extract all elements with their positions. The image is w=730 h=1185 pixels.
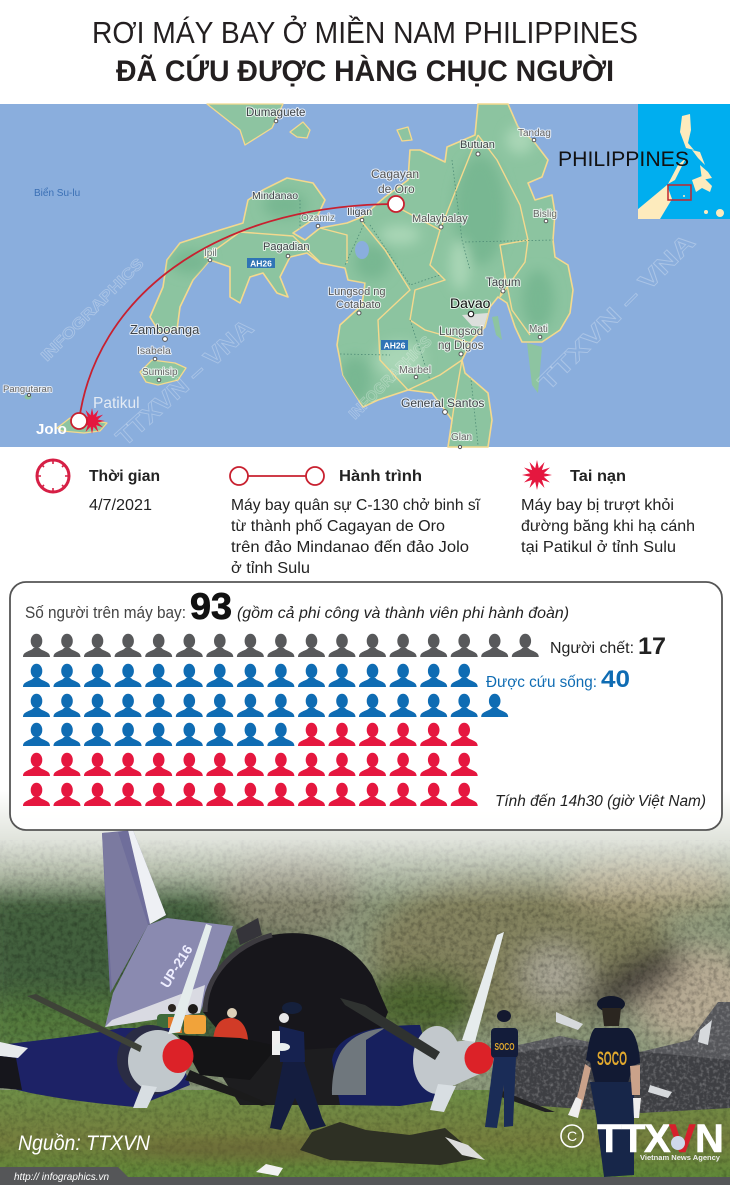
description: từ thành phố Cagayan de Oro <box>231 518 445 535</box>
copyright mark: C <box>567 1128 577 1144</box>
label PHILIPPINES: PHILIPPINES <box>558 148 689 171</box>
map watermarks <box>38 229 701 451</box>
left engine <box>117 1025 169 1095</box>
inset locator map <box>635 104 730 219</box>
city dots <box>28 119 548 449</box>
investigator SOCO small <box>485 1010 518 1128</box>
title line 2: ĐÃ CỨU ĐƯỢC HÀNG CHỤC NGƯỜI <box>116 54 614 88</box>
label dead <box>550 633 666 660</box>
place labels <box>3 107 557 443</box>
red row 1 <box>23 753 478 776</box>
footer tab <box>0 1167 128 1185</box>
legend: time <box>36 459 160 514</box>
legend: journey <box>230 467 482 577</box>
grass <box>0 1090 730 1180</box>
timestamp note: Tính đến 14h30 (giờ Việt Nam) <box>495 793 706 810</box>
source credit: Nguồn: TTXVN <box>18 1132 151 1155</box>
icon: crash burst <box>79 408 105 434</box>
left spinner <box>162 1039 194 1073</box>
map watermarks: TTXVN – VNA <box>533 229 701 396</box>
place labels: Ipil <box>204 248 217 259</box>
rescued row 1 <box>23 664 478 687</box>
total heading <box>25 586 569 627</box>
investigator SOCO large <box>568 996 641 1177</box>
total heading: Số người trên máy bay: <box>25 604 186 622</box>
place labels: Marbel <box>399 364 431 376</box>
right propeller blades <box>462 932 504 1042</box>
photo: crashed aircraft <box>0 790 730 1185</box>
map watermarks: TTXVN – VNA <box>111 314 259 451</box>
foreground wreckage <box>300 1122 480 1165</box>
place labels: Isabela <box>137 345 171 357</box>
investigator SOCO small: SOCO <box>494 1042 515 1053</box>
number 93: 93 <box>190 586 232 627</box>
route end marker <box>388 196 404 212</box>
place labels: Tandag <box>518 128 551 139</box>
note: (gồm cả phi công và thành viên phi hành đoàn) <box>237 605 569 622</box>
place labels: Cotabato <box>336 299 381 311</box>
place labels: Cagayan <box>371 167 419 181</box>
map watermarks: INFOGRAPHICS <box>38 255 147 365</box>
icon: clock <box>36 459 70 493</box>
road badge AH26 west: AH26 <box>250 258 272 268</box>
white fade at top <box>0 790 730 905</box>
investigator SOCO large: SOCO <box>597 1049 627 1070</box>
label dead: Người chết: <box>550 640 634 657</box>
label rescued: 40 <box>601 666 630 693</box>
left wing and nacelle <box>0 1028 190 1107</box>
description: đường băng khi hạ cánh <box>521 518 695 535</box>
place labels: ng Digos <box>438 340 484 352</box>
heading: Tai nạn <box>570 468 626 485</box>
left propeller blades <box>27 994 142 1052</box>
label rescued <box>486 666 630 693</box>
province boundaries <box>300 160 553 445</box>
map watermarks: INFOGRAPHICS <box>346 333 436 423</box>
TTXVN logo: TTXVN <box>597 1117 724 1161</box>
row of dead: 17 <box>23 634 539 657</box>
place labels: Sumisip <box>142 367 178 378</box>
place labels: Butuan <box>460 139 495 151</box>
description: Máy bay bị trượt khỏi <box>521 497 674 514</box>
icon: route line <box>230 467 324 485</box>
description: Máy bay quân sự C-130 chở binh sĩ <box>231 497 482 514</box>
rescued row 2 <box>23 694 508 717</box>
flight route arc <box>79 204 396 421</box>
description <box>231 497 482 577</box>
url: http:// infographics.vn <box>14 1172 109 1183</box>
legend: accident <box>521 460 695 556</box>
heading: Hành trình <box>339 468 422 485</box>
title <box>92 14 638 88</box>
place labels: Zamboanga <box>130 322 200 337</box>
label rescued: Được cứu sống: <box>486 674 597 691</box>
land: Mindanao <box>150 104 573 447</box>
place labels: de Oro <box>378 182 415 196</box>
date: 4/7/2021 <box>89 497 152 514</box>
tail fin <box>102 830 166 993</box>
place labels: Pagadian <box>263 241 310 253</box>
TTXVN logo: Vietnam News Agency <box>640 1153 721 1162</box>
label Jolo: Jolo <box>36 421 67 438</box>
place labels: Mati <box>529 324 548 335</box>
description: tại Patikul ở tỉnh Sulu <box>521 539 676 556</box>
place labels: Iligan <box>347 206 372 218</box>
right spinner <box>464 1042 494 1074</box>
rescue workers <box>157 1004 248 1040</box>
debris centre <box>222 1048 340 1105</box>
place labels: Biển Su-lu <box>34 187 80 199</box>
right wing nacelle <box>332 1025 440 1106</box>
place labels: Tagum <box>486 277 521 289</box>
background vegetation <box>0 850 730 1060</box>
investigator centre <box>270 1002 326 1130</box>
mixed row: rescued and unknown <box>23 723 478 746</box>
panel: map of southern Philippines <box>0 104 730 451</box>
panel: people on board <box>10 582 722 830</box>
burnt fuselage <box>203 933 388 1050</box>
title line 1: RƠI MÁY BAY Ở MIỀN NAM PHILIPPINES <box>92 14 638 50</box>
icon: burst <box>522 460 552 490</box>
description: trên đảo Mindanao đến đảo Jolo <box>231 539 469 556</box>
debris right <box>490 1002 730 1113</box>
registration mark: UP-216 <box>157 942 196 991</box>
Lake Lanao <box>355 241 369 259</box>
label dead: 17 <box>638 633 666 660</box>
place labels: Pangutaran <box>3 384 52 395</box>
tail fuselage <box>105 918 233 1027</box>
place labels: Bislig <box>533 209 557 220</box>
place labels: Lungsod <box>439 326 483 338</box>
place labels: Dumaguete <box>246 107 305 119</box>
description: ở tỉnh Sulu <box>231 560 310 577</box>
copyright mark <box>561 1125 583 1147</box>
place labels: Mindanao <box>252 190 298 202</box>
heading: Thời gian <box>89 468 160 485</box>
right engine <box>413 1026 461 1094</box>
highways <box>204 135 530 447</box>
footer bar <box>0 1177 730 1185</box>
inset highlight box <box>668 185 691 200</box>
route start marker <box>71 413 87 429</box>
place labels: Lungsod ng <box>328 286 386 298</box>
description <box>521 497 695 556</box>
land: other islands <box>24 104 542 433</box>
label Patikul: Patikul <box>93 395 140 412</box>
red row 2 <box>23 783 478 806</box>
place labels: Ozamiz <box>301 213 335 224</box>
Davao urban area <box>462 313 488 327</box>
place labels: Malaybalay <box>412 213 468 225</box>
road badge AH26 east: AH26 <box>384 340 406 350</box>
place labels: General Santos <box>401 396 484 410</box>
place labels: Glan <box>451 432 472 443</box>
place labels: Davao <box>450 295 491 311</box>
